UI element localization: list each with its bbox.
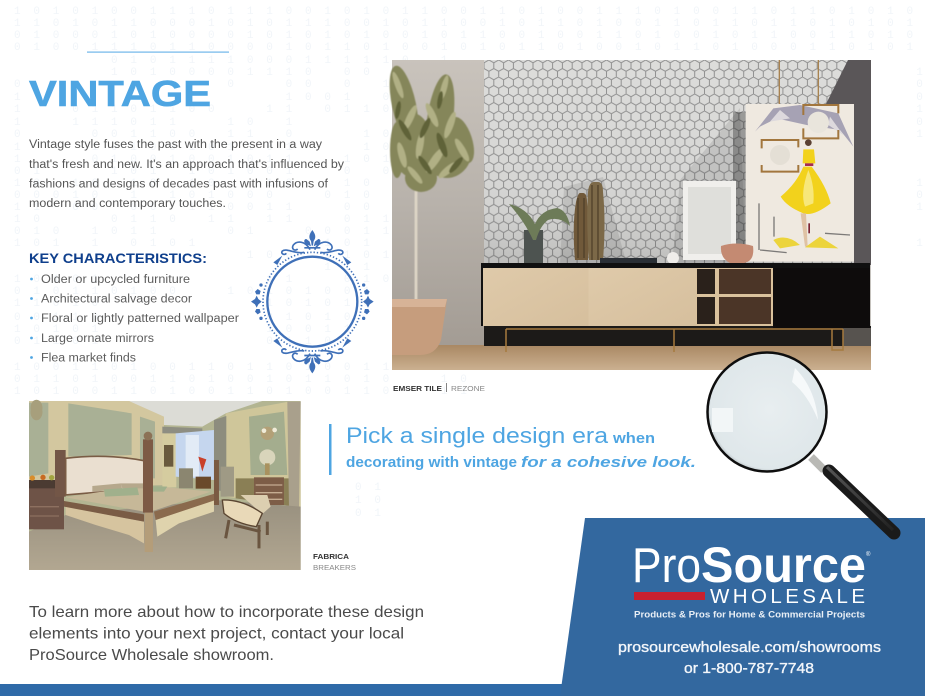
walls and panels bbox=[29, 401, 301, 507]
olive tree bbox=[384, 63, 479, 303]
chairs and table bbox=[179, 457, 234, 497]
background: binary digit pattern: 0 1 0 0 1 1 1 0 1 1 0 0 0 0 1 0 1 1 0 1 0 0 1 0 1 0 1 1 0 1 0 0 1 0 1 1 0 1 0 0 0 1 1 0 1 0 1 bbox=[14, 42, 916, 54]
background: binary digit pattern: 1 1 0 0 1 0 1 0 1 0 1 bbox=[14, 92, 925, 104]
dark wall corner bbox=[826, 60, 871, 265]
picture frame bbox=[683, 181, 736, 260]
logo: ProSource Wholesale: Products & Pros for Home & Commercial Projects bbox=[634, 610, 865, 620]
background: binary digit pattern: 1 0 1 0 1 1 1 0 1 0 0 1 0 bbox=[14, 274, 489, 286]
background: binary digit pattern: 1 0 0 1 1 0 1 0 0 1 1 0 1 1 0 1 0 0 1 1 0 1 bbox=[14, 362, 470, 374]
contact details: prosourcewholesale.com/showrooms bbox=[618, 640, 881, 656]
photo caption: Emser Tile bbox=[393, 383, 485, 393]
background: binary digit pattern: 0 0 1 1 0 0 1 0 1 0 1 0 bbox=[14, 312, 470, 324]
background: binary digit pattern: 1 1 0 1 0 1 0 1 0 1 0 1 1 1 bbox=[14, 298, 451, 310]
decorative rule above title bbox=[87, 52, 229, 53]
vases and plant bbox=[509, 182, 604, 263]
carpet bbox=[29, 500, 301, 570]
closing text: elements into your next project, contact your local bbox=[29, 626, 404, 642]
callout quote: decorating with vintage bbox=[346, 455, 517, 471]
photo caption: Fabrica: BREAKERS bbox=[313, 563, 356, 572]
background: binary digit pattern: 1 0 bbox=[355, 495, 384, 507]
key characteristics list: Large ornate mirrors bbox=[41, 333, 154, 345]
sconces and chest bbox=[30, 400, 284, 505]
closing text bbox=[29, 604, 424, 664]
background: binary digit pattern: 0 1 1 0 1 0 1 1 0 1 0 1 0 bbox=[14, 336, 470, 348]
callout quote: when bbox=[612, 431, 655, 447]
logo: ProSource Wholesale: ® bbox=[866, 551, 871, 558]
logo: ProSource Wholesale: Source bbox=[701, 537, 866, 593]
background: binary digit pattern: 0 0 0 1 0 1 1 0 1 0 0 0 0 1 0 1 0 0 1 bbox=[14, 190, 925, 202]
background: binary digit pattern: 1 1 0 1 0 1 1 0 0 0 1 0 1 0 1 1 1 0 0 1 0 1 1 0 0 1 0 1 1 0 1 0 0 1 1 0 1 1 0 1 1 0 1 0 1 0 1 bbox=[14, 18, 916, 30]
background: binary digit pattern: 1 0 1 0 1 0 0 1 1 1 0 1 1 1 0 0 1 0 1 0 1 1 0 0 1 1 0 1 0 0 1 1 1 0 1 0 0 1 1 0 1 1 0 1 0 1 0 bbox=[14, 6, 916, 18]
bed bbox=[55, 432, 219, 552]
logo: ProSource Wholesale: WHOLESALE bbox=[710, 585, 865, 608]
background: binary digit pattern: 0 1 1 0 1 0 0 1 1 0 1 0 0 1 0 1 1 0 1 0 1 0 bbox=[14, 374, 470, 386]
tray and ball bbox=[600, 252, 679, 264]
background: binary digit pattern: 1 0 0 1 1 0 1 0 0 bbox=[14, 250, 451, 262]
lower wall shadow bbox=[484, 326, 871, 346]
sideboard bbox=[481, 263, 870, 352]
bench bbox=[222, 495, 271, 548]
closing text: ProSource Wholesale showroom. bbox=[29, 647, 274, 664]
background: binary digit pattern: 1 0 1 0 1 0 1 0 1 0 1 0 1 0 bbox=[14, 178, 925, 190]
background: binary digit pattern: 0 1 0 0 0 1 0 1 0 0 0 0 1 0 1 0 1 0 1 0 0 1 0 1 1 0 0 1 0 0 1 1 0 1 0 0 1 0 1 1 0 0 1 1 0 1 0 bbox=[14, 30, 916, 42]
photo caption: Fabrica bbox=[313, 552, 356, 572]
terracotta pot bbox=[392, 299, 447, 355]
copper bowl bbox=[721, 244, 753, 263]
icon: magnifying glass bbox=[708, 352, 894, 533]
background: binary digit pattern: 1 0 1 0 0 0 0 1 1 1 0 0 0 1 0 1 0 bbox=[14, 67, 925, 79]
callout quote: Pick a single design era bbox=[346, 423, 609, 448]
contact panel bbox=[560, 518, 925, 696]
dresser bbox=[29, 475, 64, 529]
floor bbox=[392, 345, 871, 370]
callout quote: for a cohesive look. bbox=[521, 455, 696, 471]
closing text: To learn more about how to incorporate these design bbox=[29, 604, 424, 621]
background: binary digit pattern: 1 0 1 0 0 1 0 0 1 0 1 1 1 0 1 0 bbox=[14, 154, 431, 166]
key characteristics list: Older or upcycled furniture bbox=[41, 274, 190, 286]
background: binary digit pattern: 0 1 0 1 0 1 1 0 1 0 0 0 1 1 1 bbox=[14, 226, 431, 238]
key characteristics list: Architectural salvage decor bbox=[41, 294, 192, 306]
concrete wall bbox=[392, 60, 484, 345]
photo caption: Emser Tile: REZONE bbox=[451, 384, 485, 393]
background: binary digit pattern: 1 0 1 0 1 1 0 0 1 1 1 0 0 1 bbox=[14, 324, 470, 336]
background: binary digit pattern bbox=[14, 6, 925, 520]
background: binary digit pattern: 1 0 1 0 0 1 1 0 1 0 0 1 1 0 1 0 0 1 1 0 1 1 bbox=[14, 386, 470, 398]
photo: traditional bedroom bbox=[29, 400, 301, 570]
background: binary digit pattern: 1 0 1 1 0 1 1 0 0 1 1 0 1 1 0 0 0 1 1 0 bbox=[14, 104, 925, 116]
photo caption: Fabrica: FABRICA bbox=[313, 552, 350, 561]
background: binary digit pattern: 0 1 bbox=[355, 508, 384, 520]
intro text: modern and contemporary touches. bbox=[29, 198, 226, 210]
background: binary digit pattern: 0 1 bbox=[355, 482, 384, 494]
background: binary digit pattern: 1 0 1 1 0 1 0 1 1 1 0 1 1 1 0 bbox=[14, 238, 925, 250]
hex tile wall bbox=[484, 60, 871, 265]
intro text bbox=[29, 139, 344, 210]
background: binary digit pattern: 1 1 1 0 1 0 1 bbox=[14, 262, 489, 274]
background: binary digit pattern: 1 1 0 1 0 0 1 0 1 1 0 1 1 0 1 bbox=[14, 142, 451, 154]
key characteristics list: Flea market finds bbox=[41, 352, 136, 364]
logo: ProSource Wholesale bbox=[632, 537, 871, 620]
contact details bbox=[618, 640, 881, 677]
key characteristics list bbox=[30, 274, 239, 364]
bottom blue strip bbox=[0, 684, 925, 696]
photo caption: Emser Tile: EMSER TILE bbox=[393, 384, 442, 393]
logo: ProSource Wholesale: Pro bbox=[632, 539, 701, 593]
contact details: or 1-800-787-7748 bbox=[684, 661, 814, 677]
background: binary digit pattern: 0 0 0 0 0 1 0 0 1 0 0 0 bbox=[14, 79, 925, 91]
window and curtains bbox=[176, 416, 226, 492]
key characteristics list: Floral or lightly patterned wallpaper bbox=[41, 313, 239, 325]
background: binary digit pattern: 1 1 0 0 0 0 1 1 0 0 1 1 0 0 1 1 bbox=[14, 202, 925, 214]
background: binary digit pattern: 1 1 1 1 0 1 1 1 0 1 0 1 0 1 bbox=[14, 117, 925, 129]
background: binary digit pattern: 1 0 0 1 1 0 1 1 1 1 0 1 1 1 0 bbox=[14, 214, 431, 226]
background: binary digit pattern: 0 1 0 1 1 1 1 0 0 0 1 1 1 1 1 0 1 bbox=[14, 55, 451, 67]
intro text: Vintage style fuses the past with the present in a way bbox=[29, 139, 322, 151]
intro text: fashions and designs of decades past with infusions of bbox=[29, 178, 329, 190]
ceiling bbox=[129, 401, 262, 427]
title: VINTAGE bbox=[29, 73, 211, 114]
intro text: that's fresh and new. It's an approach that's influenced by bbox=[29, 159, 344, 171]
callout quote bbox=[329, 423, 696, 475]
artwork with yellow dress bbox=[746, 60, 854, 262]
background: binary digit pattern: 0 0 0 1 1 0 0 1 1 0 1 0 0 1 1 bbox=[14, 129, 925, 141]
photo: living room with hex tile wall bbox=[384, 60, 871, 370]
background: binary digit pattern: 0 1 0 1 1 0 1 0 0 1 0 1 0 1 0 0 1 1 0 1 bbox=[14, 286, 489, 298]
key characteristics heading: KEY CHARACTERISTICS: bbox=[29, 250, 207, 266]
background: binary digit pattern: 0 1 1 0 1 1 0 1 0 0 1 0 0 1 0 1 bbox=[14, 166, 489, 178]
icon: ornate mirror frame bbox=[251, 230, 374, 373]
